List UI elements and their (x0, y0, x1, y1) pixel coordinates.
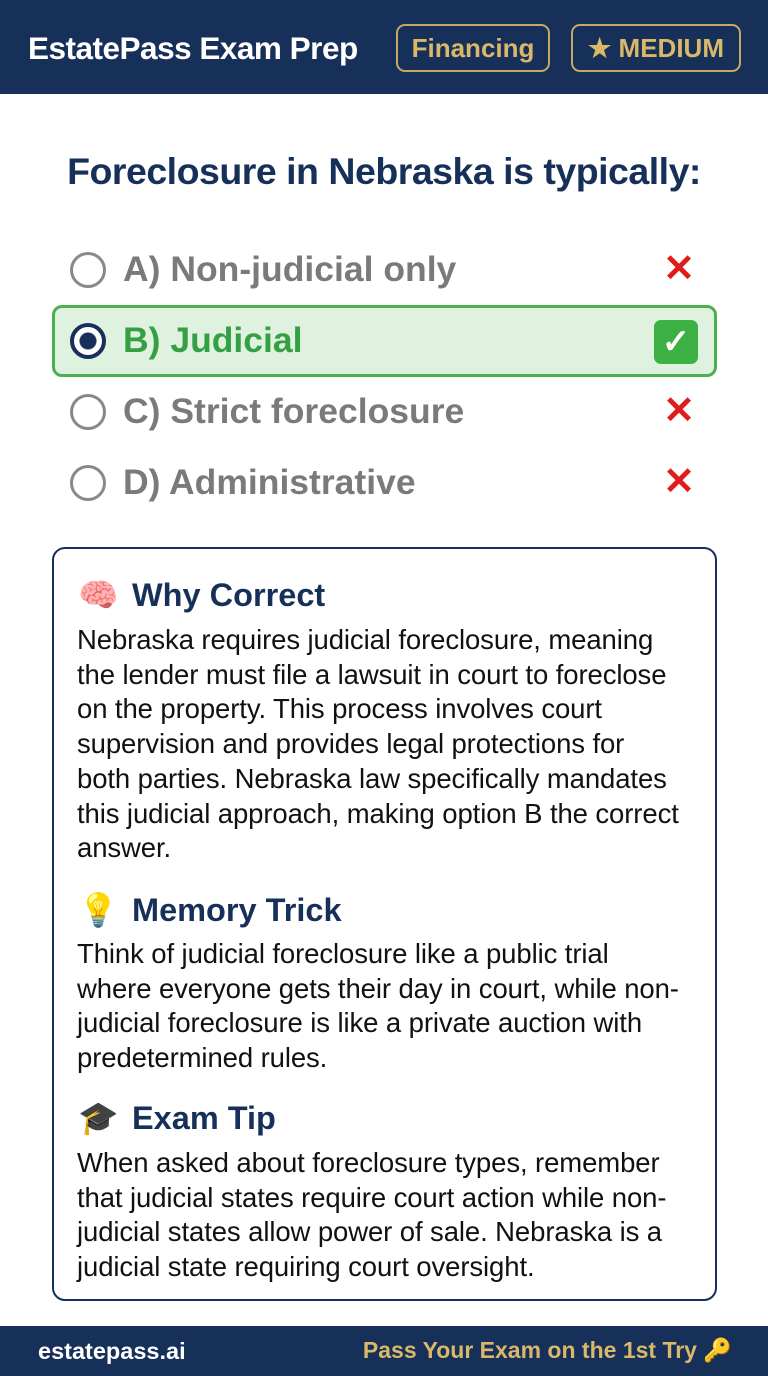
text: why correct: answer. (77, 832, 171, 863)
text: why correct: both parties. Nebraska law specifically mandates (77, 763, 667, 794)
option D (70, 461, 695, 503)
text: memory trick (76, 938, 679, 1073)
text: why correct: on the property. This process involves court (77, 693, 602, 724)
badge: difficulty: ★ MEDIUM (588, 33, 724, 63)
text: why correct: this judicial approach, making option B the correct (77, 798, 679, 829)
option C: ✕ (663, 390, 695, 432)
option B correct: ✓ (662, 323, 690, 361)
text: why correct: supervision and provides legal protections for (77, 728, 624, 759)
heading: exam tip: 🎓 (78, 1100, 118, 1136)
heading: exam tip: Exam Tip (132, 1100, 276, 1136)
footer tagline: Pass Your Exam on the 1st Try 🔑 (363, 1337, 732, 1363)
badge: difficulty (571, 24, 741, 72)
text: exam tip (76, 1147, 666, 1282)
footer bar (0, 1326, 768, 1376)
text: memory trick: judicial foreclosure is like a private auction with (77, 1007, 642, 1038)
option A: ✕ (663, 248, 695, 290)
option B correct (52, 305, 717, 377)
text: why correct: the lender must file a lawsuit in court to foreclose (77, 659, 666, 690)
heading: memory trick: Memory Trick (132, 892, 342, 928)
text: memory trick: where everyone gets their day in court, while non- (77, 973, 679, 1004)
question heading: Foreclosure in Nebraska is typically: (67, 150, 701, 192)
text: memory trick: predetermined rules. (77, 1042, 327, 1073)
brand title: EstatePass Exam Prep (28, 30, 358, 66)
heading: why correct: Why Correct (132, 577, 325, 613)
option C (70, 390, 695, 432)
option B correct: B) Judicial (123, 320, 303, 360)
text: why correct: Nebraska requires judicial foreclosure, meaning (77, 624, 653, 655)
heading: why correct: 🧠 (78, 577, 118, 613)
heading: memory trick: 💡 (78, 892, 118, 928)
text: why correct (77, 624, 679, 863)
header bar (0, 0, 768, 94)
explanation panel (52, 547, 717, 1301)
text: exam tip: judicial states allow power of sale. Nebraska is a (77, 1216, 662, 1247)
option A (70, 248, 695, 290)
text: exam tip: When asked about foreclosure types, remember (77, 1147, 660, 1178)
footer site: estatepass.ai (38, 1338, 186, 1364)
option C: C) Strict foreclosure (123, 391, 464, 431)
text: exam tip: judicial state requiring court oversight. (77, 1251, 535, 1282)
option A: A) Non-judicial only (123, 249, 456, 289)
option D: D) Administrative (123, 462, 416, 502)
badge: category (396, 24, 550, 72)
option D: ✕ (663, 461, 695, 503)
text: memory trick: Think of judicial foreclosure like a public trial (77, 938, 609, 969)
text: exam tip: that judicial states require court action while non- (77, 1182, 666, 1213)
badge: category: Financing (412, 33, 534, 63)
